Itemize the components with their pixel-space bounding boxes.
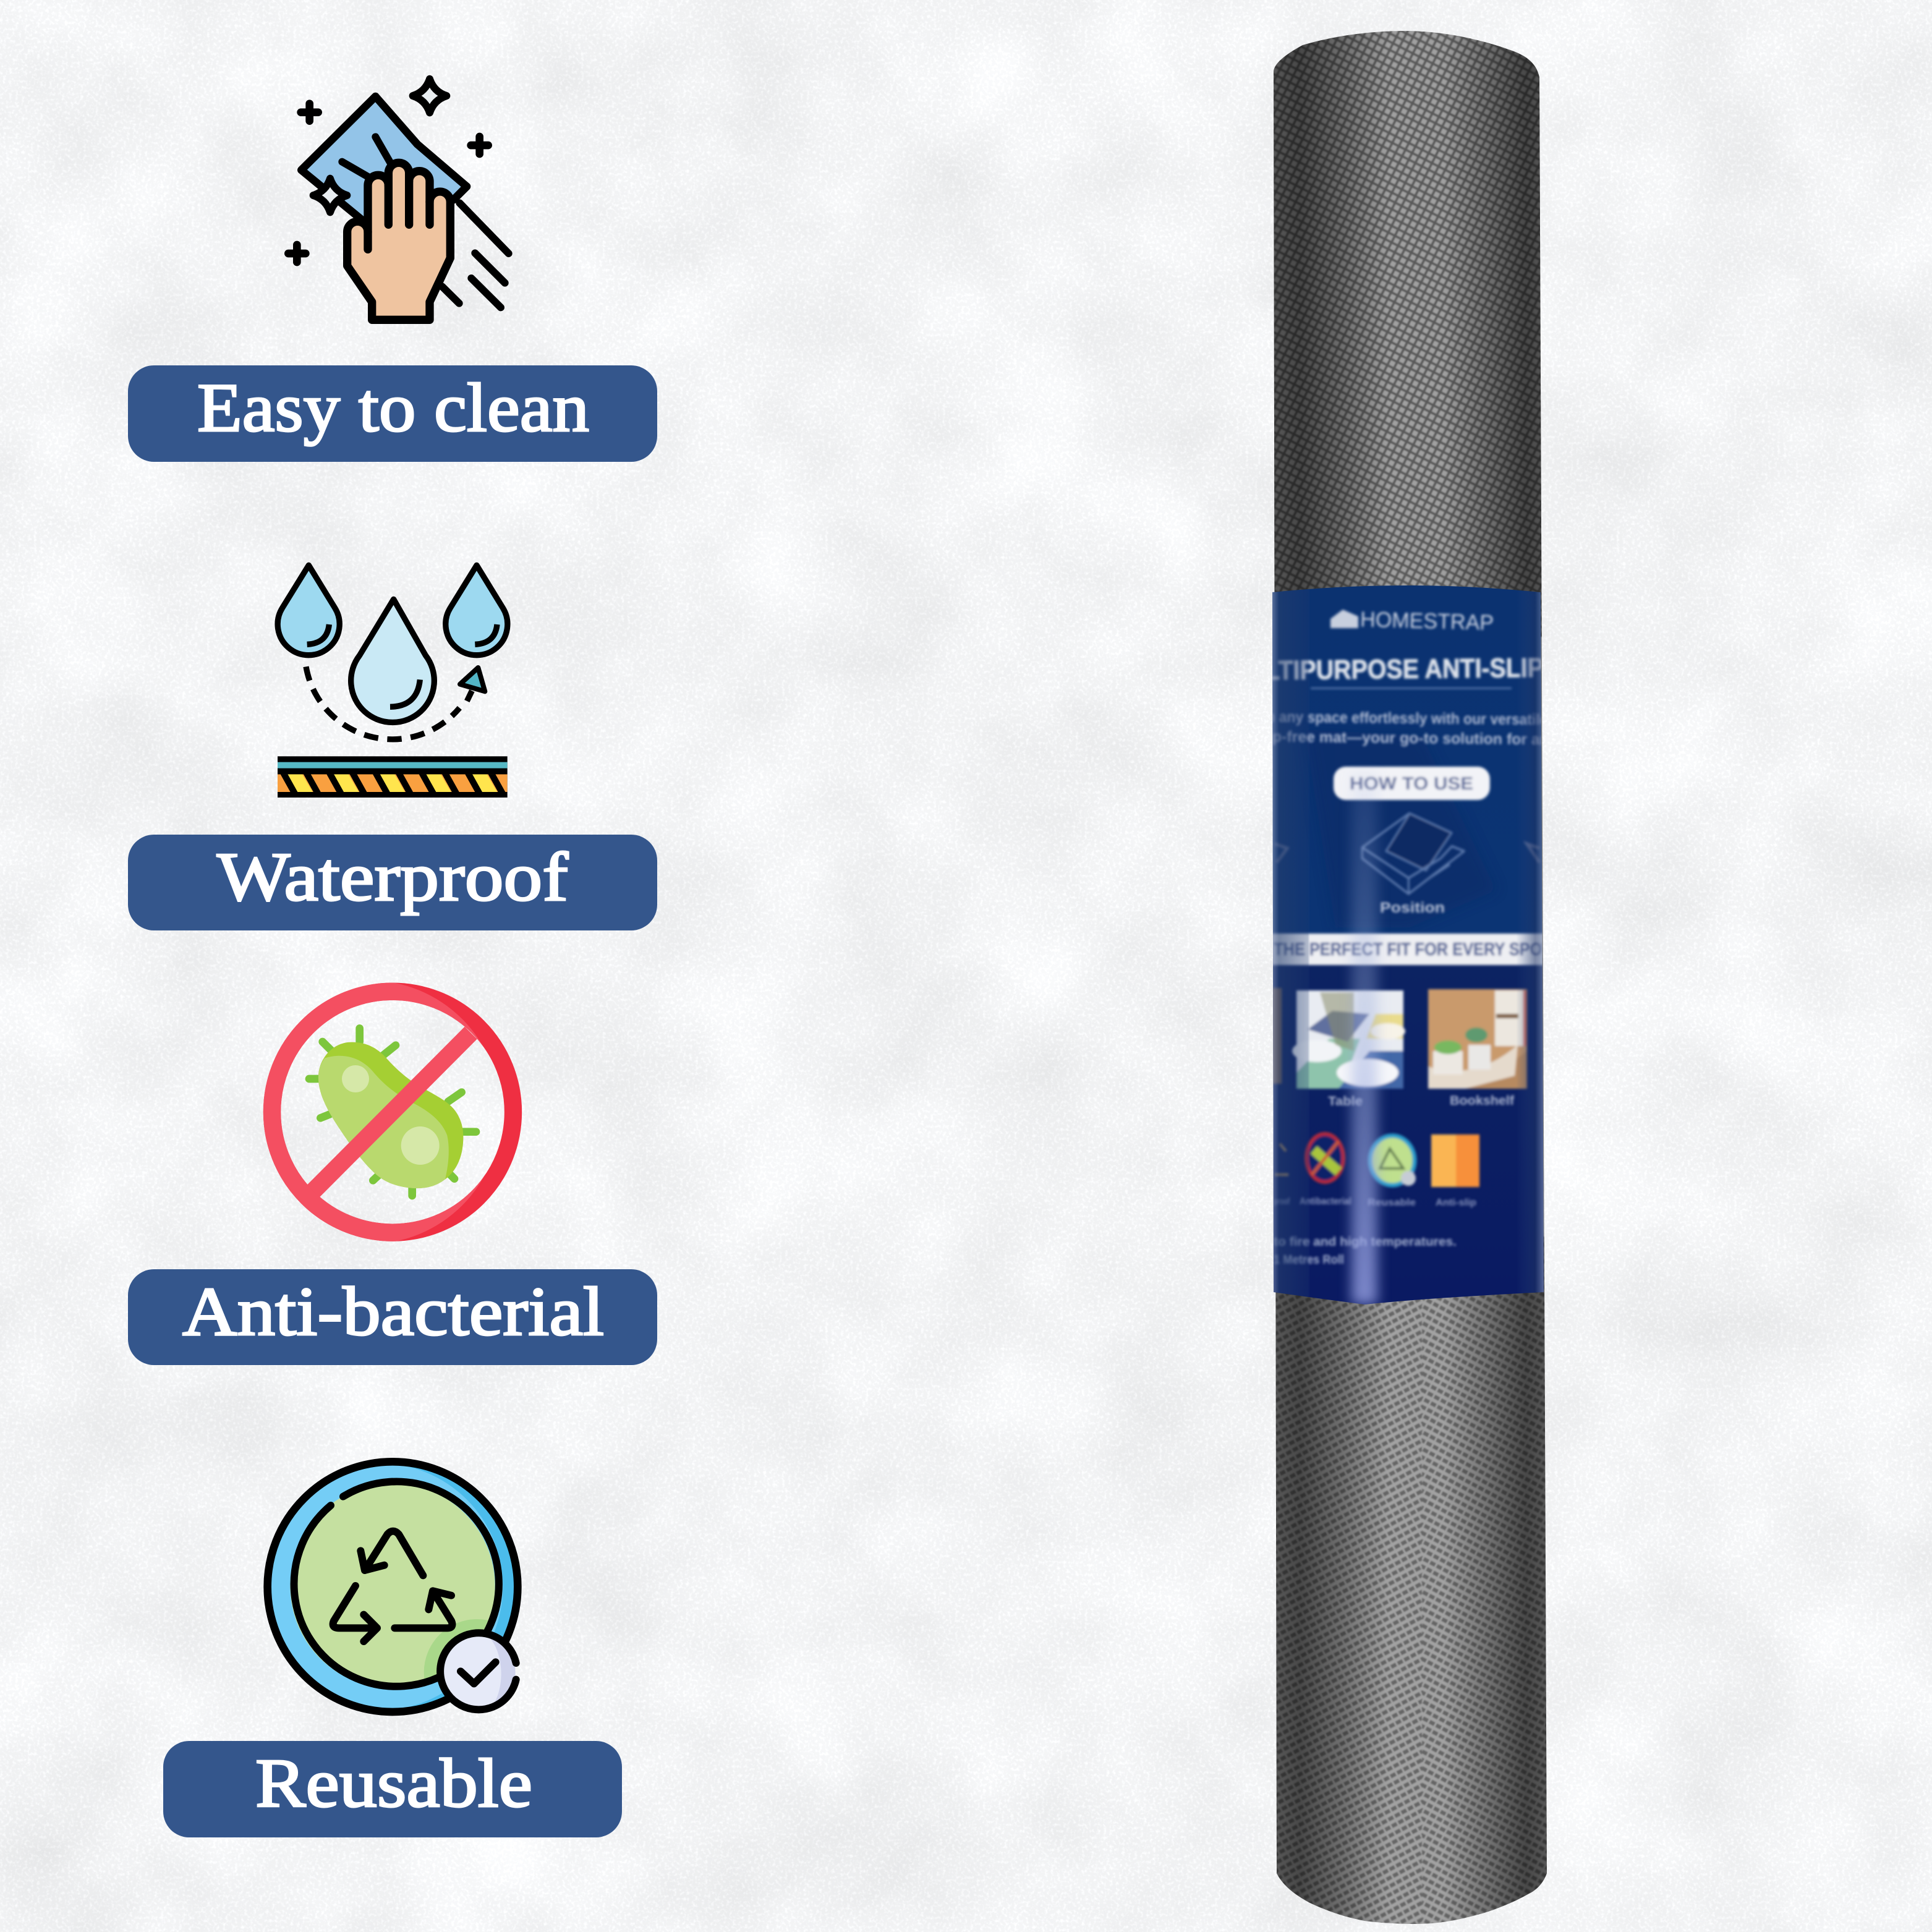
how to use badge — [1334, 767, 1490, 800]
label pill: Easy to clean: Easy to clean — [197, 370, 589, 446]
feature: Easy to clean — [128, 79, 657, 462]
product: rolled anti-slip mat — [1206, 19, 1558, 1932]
label pill: Waterproof: Waterproof — [217, 839, 569, 916]
label footer notes — [1274, 1235, 1457, 1267]
caption: Table: Table — [1328, 1094, 1363, 1109]
photo: Bookshelf — [1428, 989, 1527, 1089]
how to use badge: HOW TO USE — [1350, 774, 1473, 794]
icon captions: Reusable — [1368, 1198, 1416, 1208]
icon captions: Antibacterial — [1300, 1196, 1351, 1207]
text: Position: Position — [1380, 900, 1445, 916]
label footer notes: to fire and high temperatures. — [1274, 1235, 1457, 1249]
mini icon: anti-slip — [1431, 1134, 1479, 1187]
label pill: Reusable: Reusable — [255, 1745, 532, 1822]
icon: water drops bouncing off layered surface — [278, 565, 508, 798]
mini icon: waterproof, cropped — [1275, 1144, 1288, 1175]
icon captions: Anti-slip — [1436, 1198, 1476, 1208]
icon captions — [1274, 1196, 1476, 1208]
feature: Waterproof — [128, 565, 657, 930]
label title underline — [1311, 687, 1512, 689]
label footer notes: 1 Metres Roll — [1274, 1253, 1344, 1267]
icon: recycle symbol in circle with check badge — [268, 1462, 530, 1726]
brand logo: HOMESTRAP: HOMESTRAP — [1360, 607, 1494, 635]
wrap-around product label — [1206, 575, 1558, 1317]
mini icon: anti-bacterial — [1306, 1134, 1343, 1182]
drawer illustration — [1362, 813, 1464, 894]
icon: crossed-out bacteria — [272, 992, 513, 1233]
label pill: Reusable — [163, 1741, 622, 1837]
label pill: Easy to clean — [128, 365, 657, 462]
label pill: Anti-bacterial — [128, 1269, 657, 1365]
label description — [1206, 708, 1558, 749]
white banner: THE PERFECT FIT FOR EVERY SPOT — [1274, 940, 1552, 960]
label pill: Waterproof — [128, 835, 657, 930]
left and right step icons cropped by curve — [1275, 844, 1539, 862]
label pill: Anti-bacterial: Anti-bacterial — [182, 1274, 604, 1350]
label title: MULTIPURPOSE ANTI-SLIP — [1227, 653, 1544, 686]
mini icon: reusable — [1370, 1136, 1416, 1186]
mat roll body with diamond texture — [1261, 19, 1558, 1932]
feature: Reusable — [163, 1462, 622, 1837]
icon captions: proof — [1274, 1196, 1290, 1207]
cropped photo sliver — [1267, 988, 1282, 1084]
label description: slip-free mat—your go-to solution for any — [1255, 728, 1558, 749]
caption: Bookshelf: Bookshelf — [1450, 1094, 1515, 1108]
icon: hand wiping with cloth — [288, 79, 509, 320]
label description: Transform any space effortlessly with our versatile, — [1206, 708, 1552, 728]
feature: Anti-bacterial — [128, 992, 657, 1365]
photo: Table — [1292, 990, 1405, 1089]
white banner — [1267, 934, 1552, 965]
